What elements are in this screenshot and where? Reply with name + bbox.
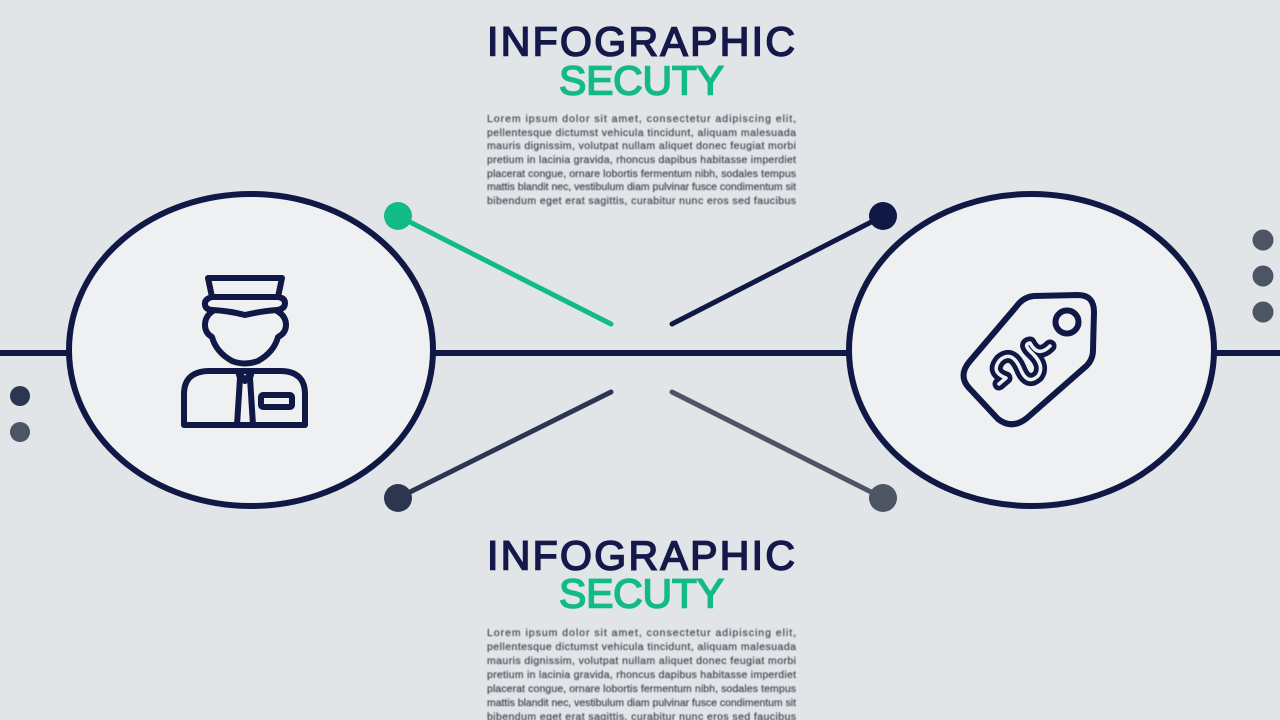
top text block: bibendum eget erat sagittis, curabitur nunc eros sed faucibus (487, 195, 796, 207)
decorative dots right (1252, 230, 1274, 322)
icon: dollar mark (996, 343, 1050, 384)
top heading: SECUTY (559, 58, 724, 104)
top text block: mauris dignissim, volutpat nullam aliquet donec feugiat morbi (487, 140, 796, 152)
bottom heading: SECUTY (559, 570, 724, 616)
bottom text block: pellentesque dictumst vehicula tincidunt, aliquam malesuada (487, 641, 796, 653)
top heading: INFOGRAPHIC (487, 18, 795, 64)
top heading (487, 18, 795, 104)
top text block: Lorem ipsum dolor sit amet, consectetur adipiscing elit, (487, 113, 796, 125)
bottom text block: placerat congue, ornare lobortis fermentum nibh, sodales tempus (487, 683, 796, 695)
arrow: green connector (384, 202, 611, 324)
top text block: placerat congue, ornare lobortis fermentum nibh, sodales tempus (487, 168, 796, 180)
arrow: slate connector bottom left (384, 392, 611, 512)
top text block: pretium in lacinia gravida, rhoncus dapibus habitasse imperdiet (487, 154, 796, 166)
icon: price tag (964, 295, 1094, 424)
arrow: grey connector bottom right (672, 392, 897, 512)
top text block (487, 113, 796, 207)
bottom heading (487, 532, 795, 616)
bottom text block: Lorem ipsum dolor sit amet, consectetur adipiscing elit, (487, 627, 796, 639)
top text block: pellentesque dictumst vehicula tincidunt, aliquam malesuada (487, 127, 796, 139)
bottom text block: pretium in lacinia gravida, rhoncus dapibus habitasse imperdiet (487, 669, 796, 681)
icon: security guard (184, 278, 305, 425)
top text block: mattis blandit nec, vestibulum diam pulvinar fusce condimentum sit (487, 181, 796, 193)
arrow: navy connector top right (672, 202, 897, 324)
horizontal connector line (0, 350, 1280, 356)
panel: left circle (69, 194, 433, 506)
bottom heading: INFOGRAPHIC (487, 532, 795, 578)
bottom text block: mauris dignissim, volutpat nullam aliquet donec feugiat morbi (487, 655, 796, 667)
panel: right circle (849, 194, 1214, 506)
bottom text block: mattis blandit nec, vestibulum diam pulvinar fusce condimentum sit (487, 697, 796, 709)
bottom text block (487, 627, 796, 720)
decorative dots left (10, 386, 30, 442)
